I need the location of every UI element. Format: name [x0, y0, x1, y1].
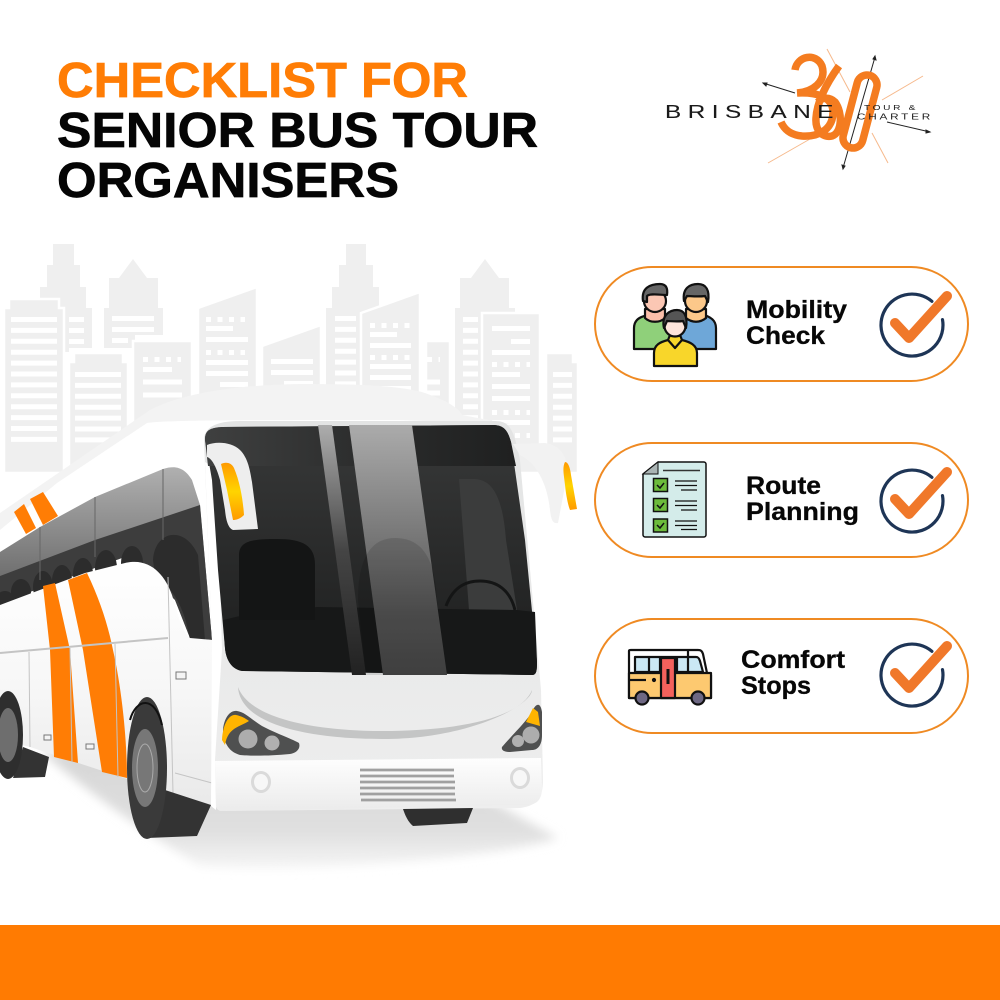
icon: people [634, 284, 716, 366]
bumper [215, 758, 542, 811]
side latches [44, 672, 186, 749]
a-pillar [205, 462, 222, 810]
fog lights [252, 768, 528, 792]
side panel lines [0, 577, 212, 793]
driver silhouette [239, 539, 315, 620]
logo tagline tour: TOUR & [864, 103, 918, 112]
left mirror [207, 443, 258, 530]
city skyline [4, 244, 578, 473]
side windows [0, 467, 212, 640]
roof: white band [0, 420, 505, 560]
checklist item: route planning [595, 443, 968, 557]
label: comfort stops [741, 646, 846, 700]
title line: organisers: ORGANISERS [57, 154, 399, 208]
grille [360, 770, 456, 800]
logo numerals 360 [781, 57, 877, 148]
label: comfort stops: Stops [741, 672, 811, 700]
checklist item: mobility check [595, 267, 968, 381]
front side wheel [127, 697, 211, 839]
steering area [459, 479, 517, 610]
hood crease [238, 687, 532, 739]
bus illustration [0, 384, 577, 868]
roof: light gray shell [0, 384, 510, 530]
windshield reflection bands [318, 425, 447, 675]
logo arrows [763, 56, 930, 169]
right headlight [502, 705, 542, 752]
icon: small bus [629, 650, 711, 704]
title line: checklist for: CHECKLIST FOR [57, 54, 468, 108]
roof stripes [14, 492, 58, 534]
icon: check mark [881, 644, 947, 706]
bus side body [0, 562, 222, 810]
right mirror [513, 443, 577, 523]
label: route planning [746, 472, 859, 526]
footer band [0, 925, 1000, 1000]
logo wordmark: BRISBANE [665, 101, 840, 122]
label: comfort stops: Comfort [741, 646, 846, 674]
logo: Brisbane 360 Tour & Charter [665, 49, 933, 169]
icon: check mark [881, 470, 947, 532]
label: mobility check [746, 296, 847, 350]
title [57, 54, 538, 208]
logo tagline charter: CHARTER [857, 112, 933, 122]
icon: check mark [881, 294, 947, 356]
windshield [205, 425, 537, 675]
label: mobility check: Check [746, 322, 825, 350]
bus front mask [204, 421, 543, 811]
dashboard shadow [223, 607, 537, 675]
left headlight [222, 711, 299, 756]
front wheel [403, 808, 473, 826]
skyline windows [11, 318, 572, 440]
label: route planning: Route [746, 472, 821, 500]
rear wheel [0, 691, 49, 779]
side stripes [43, 573, 127, 778]
icon: document checklist [643, 462, 706, 537]
label: route planning: Planning [746, 498, 859, 526]
title line: senior bus tour: SENIOR BUS TOUR [57, 104, 538, 158]
label: mobility check: Mobility [746, 296, 847, 324]
checklist item: comfort stops [595, 619, 968, 733]
